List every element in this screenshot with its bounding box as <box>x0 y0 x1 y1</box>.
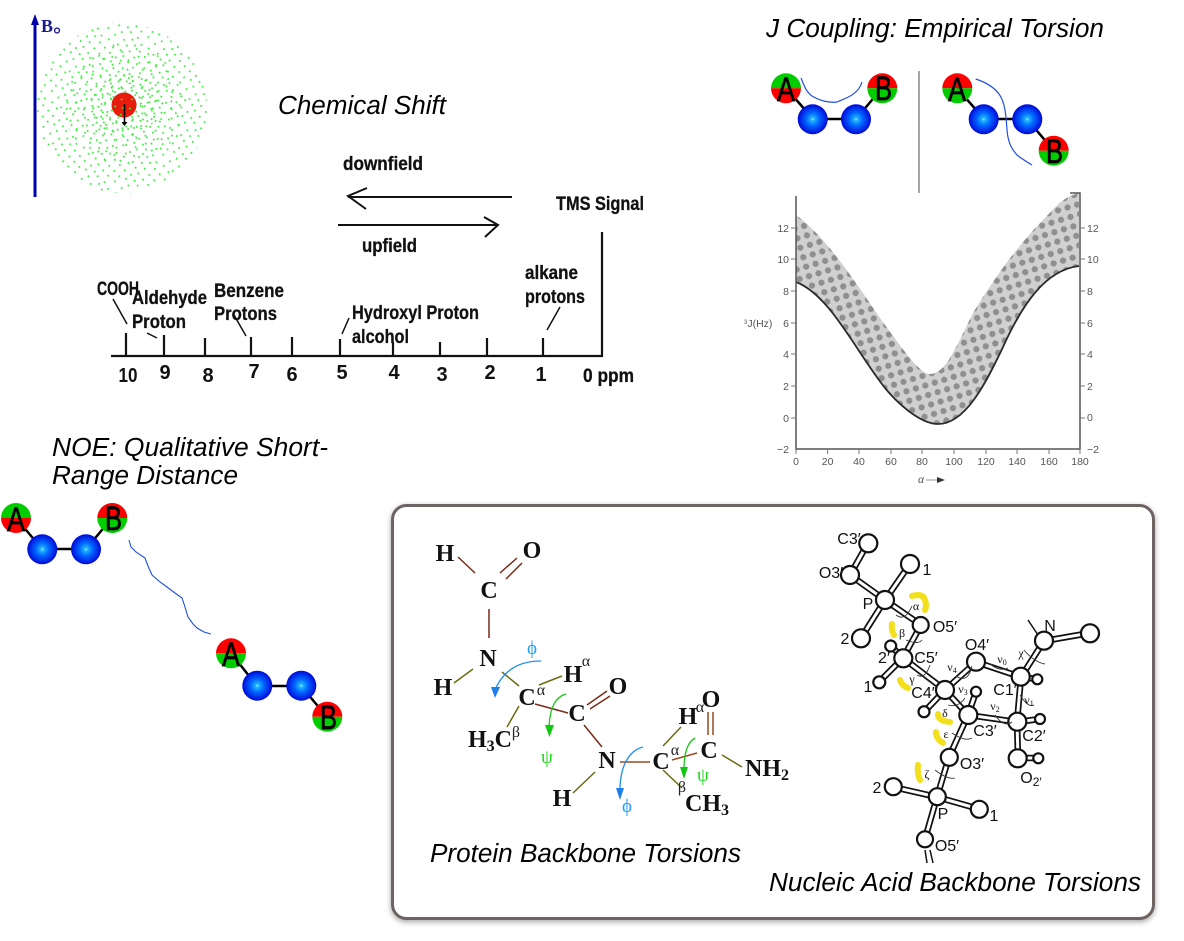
right y tick labels: 12 <box>1087 223 1099 235</box>
protein backbone diagram <box>434 538 789 819</box>
phi arrow 1 <box>491 638 541 698</box>
torsion symbols: α <box>913 599 920 613</box>
atom labels: 3 <box>721 802 729 819</box>
x tick labels: 80 <box>916 456 928 468</box>
phi arrow 2 <box>616 747 643 817</box>
phi arrow 2: ϕ <box>622 796 632 817</box>
atom labels: α <box>582 653 591 670</box>
torsion symbols: ν <box>990 699 996 713</box>
axis numbers: 0 ppm <box>583 366 634 387</box>
torsion symbols: 4 <box>953 666 957 675</box>
axis numbers: 5 <box>336 362 348 384</box>
right y tick labels: 6 <box>1087 318 1093 330</box>
atom labels: O <box>609 674 627 700</box>
axis numbers: 4 <box>388 362 400 384</box>
x tick labels: 60 <box>885 456 897 468</box>
atom labels: O <box>702 687 720 713</box>
x tick labels: 100 <box>945 456 963 468</box>
y axis title: 3 <box>744 320 748 326</box>
Karplus curve chart <box>744 193 1099 486</box>
peak labels: Protons <box>214 304 277 325</box>
electron cloud dots <box>37 23 207 193</box>
J coupling trans molecule: A <box>948 71 966 109</box>
upfield label: upfield <box>362 236 417 257</box>
x axis title <box>918 474 945 486</box>
atom labels <box>434 538 789 819</box>
torsion symbols: 3 <box>964 688 968 697</box>
heading: NOE <box>52 434 328 490</box>
atom labels: NH <box>745 756 781 782</box>
B0 field arrow <box>31 14 39 197</box>
J coupling cis molecule: B <box>875 70 892 108</box>
left y tick labels: 4 <box>783 349 789 361</box>
atom labels: α <box>537 682 546 699</box>
right y tick labels: 10 <box>1087 254 1099 266</box>
axis numbers: 6 <box>286 364 298 386</box>
right y tick labels: 2 <box>1087 381 1093 393</box>
leader lines <box>113 299 560 338</box>
atom labels: N <box>479 646 497 672</box>
x axis title: α <box>918 474 925 486</box>
atom labels: 1 <box>864 679 873 696</box>
x tick labels <box>793 456 1089 468</box>
nucleus <box>112 92 136 118</box>
right y tick labels: 8 <box>1087 286 1093 298</box>
axis numbers: 7 <box>248 361 260 383</box>
psi arrow 2: ψ <box>697 765 709 786</box>
atom labels: CH <box>685 791 721 817</box>
torsion symbols: ε <box>943 727 949 741</box>
atom labels: 1 <box>990 808 999 825</box>
x tick labels: 140 <box>1008 456 1026 468</box>
left y tick labels: 12 <box>777 223 789 235</box>
peak labels: Proton <box>132 312 186 333</box>
divider <box>918 71 920 193</box>
atom labels: β <box>678 779 686 796</box>
panel: backbone torsions <box>392 506 1154 918</box>
atom labels: P <box>938 806 948 823</box>
atom labels: P <box>863 596 873 613</box>
atom labels: N <box>598 748 616 774</box>
atom labels: C <box>700 738 718 764</box>
x tick labels: 40 <box>853 456 865 468</box>
x tick labels: 0 <box>793 456 799 468</box>
left y tick labels: −2 <box>777 444 789 456</box>
torsion symbols: γ <box>908 672 915 686</box>
peak labels: Benzene <box>214 281 284 302</box>
double bonds <box>850 543 1090 863</box>
atom labels: H <box>553 786 572 812</box>
x tick labels: 120 <box>977 456 995 468</box>
B0 label: B <box>41 16 53 36</box>
right y tick labels: 4 <box>1087 349 1093 361</box>
yellow torsion marks <box>892 595 950 780</box>
J coupling trans molecule: B <box>1046 133 1063 171</box>
downfield arrow <box>348 188 512 209</box>
atom labels: C <box>495 727 512 753</box>
torsion symbols: β <box>899 626 905 640</box>
J coupling cis molecule: A <box>777 71 795 109</box>
phi arrow 1: ϕ <box>527 638 537 659</box>
atom labels: C <box>652 749 670 775</box>
right y tick labels: −2 <box>1087 444 1099 456</box>
atom labels: β <box>512 724 520 741</box>
x tick labels: 180 <box>1071 456 1089 468</box>
atom labels: O4′ <box>965 637 989 654</box>
peak labels: Aldehyde <box>132 288 207 309</box>
atom labels: H <box>468 727 487 753</box>
peak labels: COOH <box>97 279 139 300</box>
x tick labels: 20 <box>822 456 834 468</box>
left y tick labels: 6 <box>783 318 789 330</box>
torsion symbols: ν <box>997 652 1003 666</box>
NOE first molecule: B <box>105 500 122 538</box>
peak labels: alcohol <box>352 327 409 348</box>
atom labels: 3 <box>487 738 495 755</box>
axis numbers: 8 <box>202 365 214 387</box>
nuclear moment arrow <box>122 104 128 126</box>
atom labels: α <box>671 742 680 759</box>
torsion symbols: δ <box>942 706 948 720</box>
torsion symbols: ν <box>958 682 964 696</box>
torsion symbols: ζ <box>925 767 930 781</box>
atom labels: N <box>1044 618 1056 635</box>
shaded band <box>796 193 1079 424</box>
B0 label <box>41 16 59 36</box>
downfield label: downfield <box>343 154 423 175</box>
atom labels: C3′ <box>973 723 997 740</box>
atom labels: O <box>1020 770 1033 787</box>
atoms <box>841 534 1099 847</box>
heading: J coupling: J Coupling: Empirical Torsion <box>765 15 1104 43</box>
lower envelope <box>796 266 1079 424</box>
electron cloud figure with B0 field arrow <box>31 14 207 197</box>
torsion symbols: ν <box>947 660 953 674</box>
torsion symbols: ν <box>1024 693 1030 707</box>
NOE distance line <box>129 540 211 634</box>
atom labels: α <box>696 699 705 716</box>
left y tick labels: 0 <box>783 413 789 425</box>
psi arrow 2 <box>680 738 709 786</box>
NOE second molecule: A <box>222 636 240 674</box>
x tick labels: 160 <box>1040 456 1058 468</box>
atom labels: C <box>518 685 536 711</box>
atom labels: H <box>564 662 583 688</box>
left y tick labels: 10 <box>777 254 789 266</box>
panel frame <box>392 506 1154 918</box>
axis numbers: 1 <box>535 364 547 386</box>
heading: NOE: Range Distance <box>52 462 238 490</box>
atom labels: 2 <box>873 780 882 797</box>
atom labels: C5′ <box>914 650 938 667</box>
heading: NOE: NOE: Qualitative Short- <box>52 434 328 462</box>
psi arrow 1 <box>541 694 566 768</box>
axes <box>796 193 1080 449</box>
torsion symbols: 1 <box>1030 699 1034 708</box>
atom labels: O5′ <box>933 619 957 636</box>
axis numbers: 2 <box>484 362 496 384</box>
peak labels: Hydroxyl Proton <box>352 303 479 324</box>
left y tick labels: 8 <box>783 286 789 298</box>
right y tick labels: 0 <box>1087 412 1093 424</box>
caption: protein: Protein Backbone Torsions <box>430 840 741 868</box>
torsion symbols <box>899 599 1034 781</box>
atom labels: H <box>436 541 455 567</box>
axis numbers: 10 <box>118 365 138 387</box>
chemical shift scale <box>97 154 644 387</box>
peak labels: protons <box>525 287 585 308</box>
atom labels: H <box>434 675 453 701</box>
psi arrow 1: ψ <box>541 747 553 768</box>
atom labels: 2′ <box>878 650 890 667</box>
atom labels: H <box>679 704 698 730</box>
axis numbers: 3 <box>436 364 448 386</box>
atom labels: 1 <box>923 562 932 579</box>
atom labels: O5′ <box>935 838 959 855</box>
atom labels: 2 <box>781 767 789 784</box>
ppm axis <box>111 232 602 356</box>
upfield arrow <box>338 217 498 237</box>
atom labels: C <box>480 578 498 604</box>
peak labels: alkane <box>525 263 578 284</box>
NOE second molecule <box>216 636 342 737</box>
right y tick labels <box>1087 223 1099 456</box>
NOE first molecule <box>1 500 127 564</box>
rotation arrows <box>896 606 1045 778</box>
atom labels: 2′ <box>1033 775 1042 789</box>
axis numbers <box>118 361 634 387</box>
atom labels: O3′ <box>960 756 984 773</box>
atom labels: O3′ <box>819 565 843 582</box>
y axis title: J(Hz) <box>747 318 772 330</box>
torsion symbols: χ <box>1017 646 1024 660</box>
peak labels <box>97 263 585 348</box>
atom labels: C4′ <box>911 685 935 702</box>
TMS label: TMS Signal <box>556 194 644 215</box>
left y tick labels: 2 <box>783 381 789 393</box>
atom labels: C3′ <box>837 531 861 548</box>
atom labels: C2′ <box>1022 728 1046 745</box>
left y tick labels <box>777 223 789 456</box>
atom labels <box>819 531 1056 855</box>
atom labels: O <box>523 538 541 564</box>
caption: nucleic acid: Nucleic Acid Backbone Torsions <box>769 869 1141 897</box>
J coupling trans molecule <box>942 71 1069 171</box>
atom labels: C1′ <box>993 682 1017 699</box>
nucleic acid backbone diagram <box>819 531 1099 863</box>
heading: chemical shift: Chemical Shift <box>278 92 447 120</box>
J coupling cis molecule <box>771 70 897 134</box>
torsion symbols: 2 <box>996 705 1000 714</box>
torsion symbols: 0 <box>1003 658 1007 667</box>
bonds <box>454 557 742 793</box>
axis numbers: 9 <box>159 362 171 384</box>
atom labels: C <box>568 701 586 727</box>
NOE first molecule: A <box>7 501 25 539</box>
NOE second molecule: B <box>320 699 337 737</box>
atom labels: 2 <box>841 631 850 648</box>
